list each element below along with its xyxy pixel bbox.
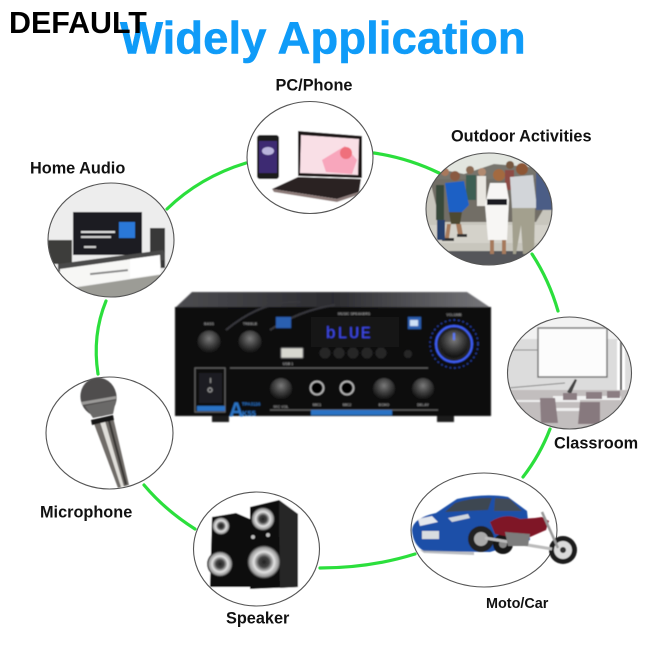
panel captions [204,312,462,409]
amplifier feet [212,416,454,422]
knob: mic vol [270,378,292,400]
panel: PC/Phone [247,76,373,214]
photo: phone and laptop [256,130,372,202]
knob: delay [412,378,434,400]
panel captions: DELAY [417,403,430,407]
logo watermark [226,302,335,330]
jacks [310,382,354,394]
buttons [320,348,412,358]
panel captions: MIC2 [343,403,351,407]
display: bLUE [326,325,372,344]
power switch [195,368,225,412]
panel captions: MIC VOL [274,405,289,409]
model badge [229,400,261,422]
panel captions: ECHO [379,403,389,407]
panel: Microphone [40,374,173,522]
panel: Moto/Car [411,473,577,612]
display [311,317,399,347]
amplifier [175,292,491,422]
photo: classroom with projection screen [507,317,632,429]
ring [48,183,174,297]
panel captions: TREBLE [243,322,258,326]
knob: treble [238,330,262,354]
photo: microphone [77,374,129,488]
ring [247,102,373,214]
ring [426,153,552,265]
photo: blue car and motorcycle [412,495,577,564]
amplifier top face [175,292,491,308]
panel: Classroom [507,317,638,452]
label: Home Audio: Home Audio [30,160,125,178]
knob: bass [198,330,220,354]
connecting green arcs [96,153,558,568]
blue strip [311,410,392,415]
panel: Home Audio [30,160,174,297]
panel captions: MIC1 [313,403,321,407]
panel captions: VOLUME [446,313,462,317]
ring [411,473,557,587]
panel captions: MUSIC SPEAKERS [338,312,371,316]
label: Microphone: Microphone [40,504,132,522]
model badge: A [229,400,243,422]
ring [508,317,632,429]
label: Moto/Car: Moto/Car [486,596,549,612]
amplifier front face [175,307,491,416]
panel badges [276,317,421,329]
panel: Speaker [194,492,320,628]
watermark label: DEFAULT [9,6,147,40]
panel captions: USB 1 [283,362,293,366]
usb port [281,348,303,358]
photo: dancing crowd [426,153,554,265]
label: Classroom: Classroom [554,434,638,452]
ring [46,377,173,489]
panel: Outdoor Activities [426,128,592,265]
panel captions: BASS [204,322,215,326]
divider lines [230,368,438,410]
label: Speaker: Speaker [226,610,290,628]
knob: echo [373,378,395,400]
photo: TV on cabinet [48,183,174,297]
label: Outdoor Activities: Outdoor Activities [451,128,592,146]
photo: pair of speakers [206,500,299,590]
ring [194,492,320,606]
model badge: K55 [242,409,256,418]
title: Widely Application [120,12,526,64]
model badge: TPA3116 [242,402,261,406]
volume knob [430,320,478,368]
label: PC/Phone: PC/Phone [276,76,352,94]
